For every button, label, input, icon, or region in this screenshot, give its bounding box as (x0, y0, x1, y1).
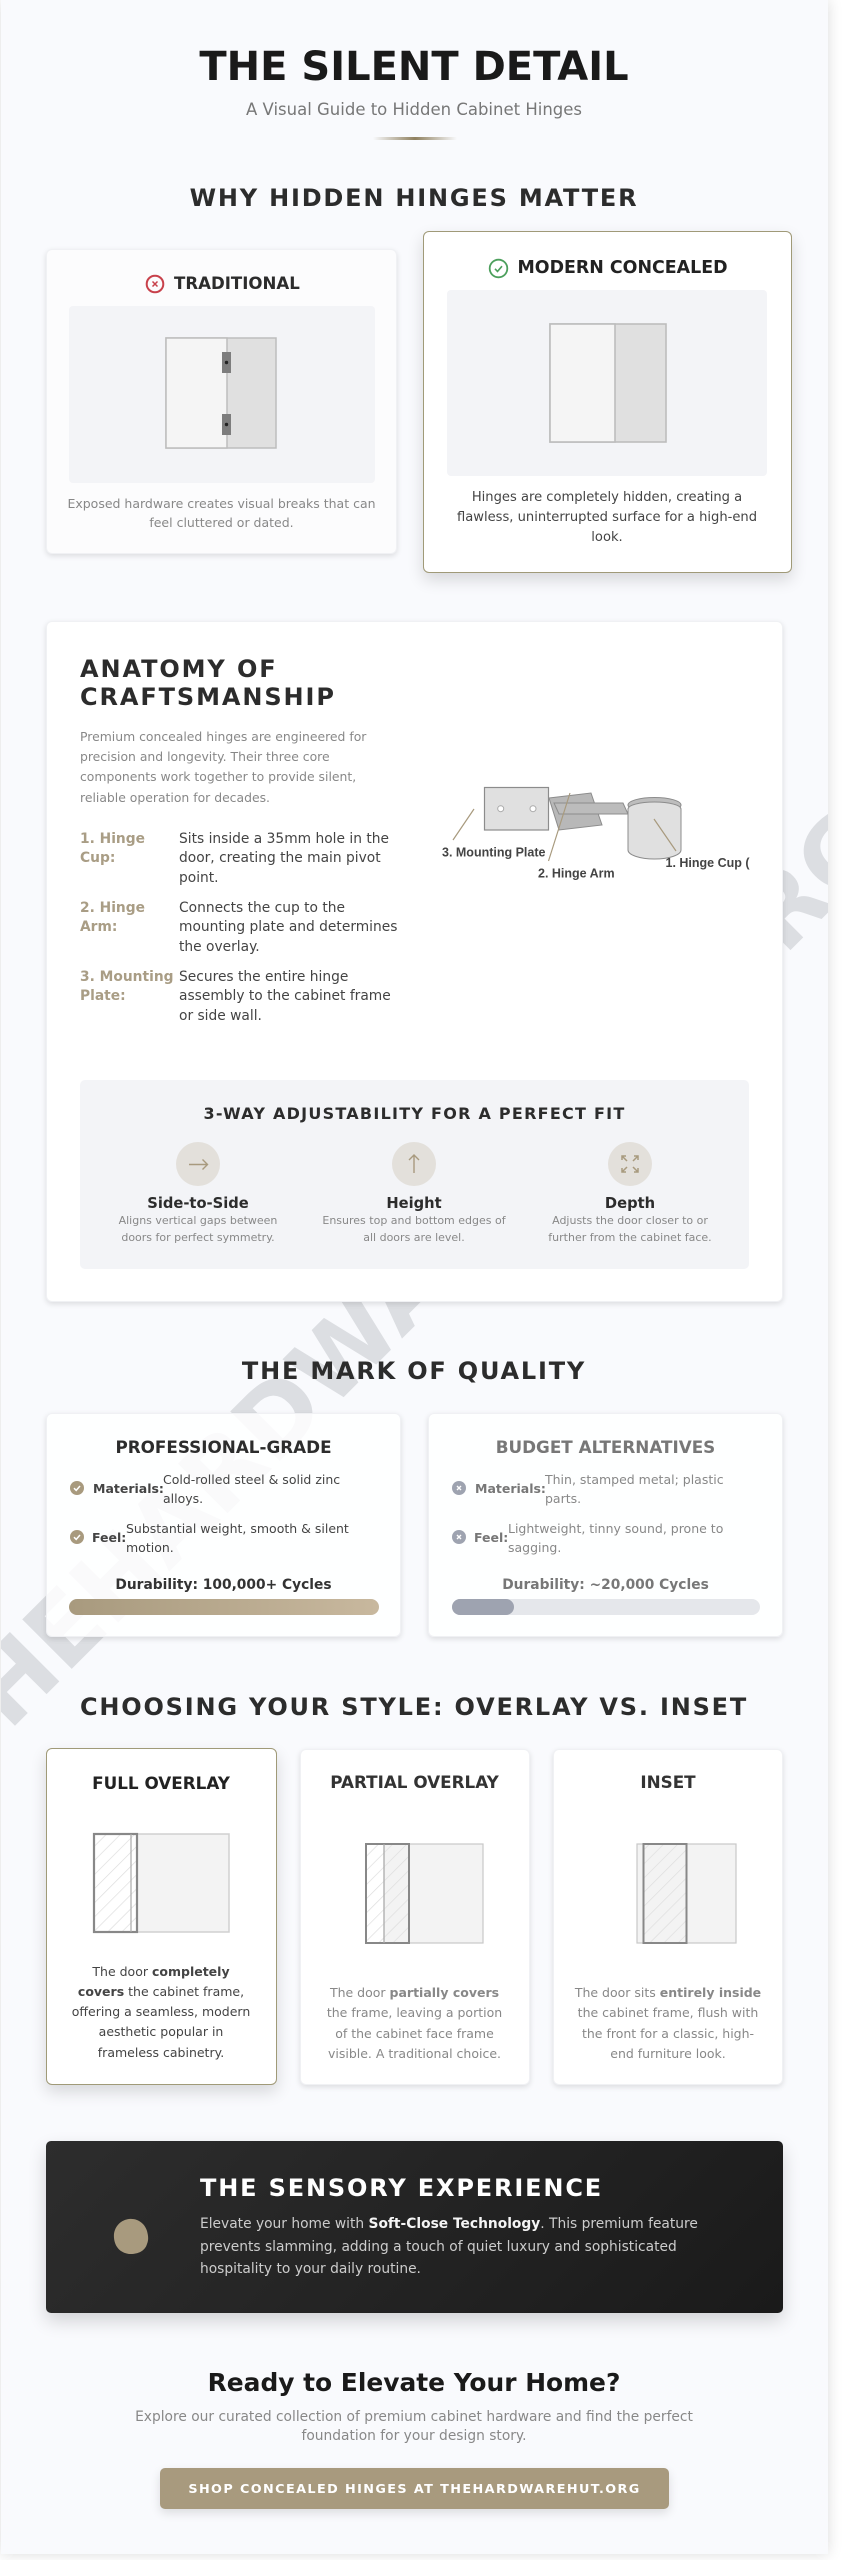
text: of the cabinet face frame (335, 2026, 494, 2041)
label: Feel: (474, 1530, 508, 1545)
description: further from the cabinet face. (548, 1231, 712, 1244)
label: Height (386, 1194, 442, 1212)
heading: INSET (640, 1772, 696, 1792)
panel: traditional (46, 249, 397, 554)
text: parts. (545, 1491, 581, 1506)
part label: 2. Hinge (80, 900, 145, 916)
diagram: hinge anatomy: 3. Mounting Plate (442, 846, 546, 860)
diagram: full overlay (92, 1832, 230, 1934)
part label: 1. Hinge (80, 831, 145, 847)
icon: up arrow (392, 1142, 436, 1186)
heading: modern concealed: MODERN CONCEALED (518, 258, 728, 278)
label: Feel: (92, 1530, 126, 1545)
panel: sensory experience (46, 2141, 783, 2313)
panel: inset (553, 1749, 783, 2085)
icon: soft-close blob (114, 2219, 149, 2254)
text (200, 2213, 698, 2281)
text: call to action (0, 2408, 828, 2447)
subtitle: A Visual Guide to Hidden Cabinet Hinges (246, 100, 582, 118)
part description: Sits inside a 35mm hole in the (179, 831, 389, 847)
icon: cross (452, 1481, 466, 1495)
label: Materials: (475, 1481, 546, 1496)
diagram: hinge anatomy: 2. Hinge Arm (538, 866, 615, 880)
icon: cross (452, 1530, 466, 1544)
heading: the mark of quality: THE MARK OF QUALITY (242, 1357, 586, 1385)
diagram: hinge anatomy: 1. Hinge Cup ( (666, 856, 750, 870)
text: modern description: Hinges are completely hidden, creating a (472, 490, 742, 505)
icon: expand arrows (608, 1142, 652, 1186)
text: modern description: flawless, uninterrupted surface for a high-end (457, 510, 757, 525)
durability label: Durability: 100,000+ Cycles (115, 1576, 332, 1592)
text (126, 1520, 349, 1555)
panel: budget alternatives (428, 1413, 783, 1637)
text: hospitality to your daily routine. (200, 2261, 421, 2277)
adjustment: side-to-side (118, 1142, 277, 1244)
text: traditional description: feel cluttered or dated. (149, 515, 294, 530)
description: Ensures top and bottom edges of (322, 1214, 506, 1227)
door diagram (165, 337, 277, 449)
text: covers the cabinet frame, (78, 1984, 244, 1999)
diagram: inset (636, 1843, 740, 1945)
row: materials (70, 1472, 340, 1506)
diagram: partial overlay (364, 1843, 486, 1945)
part description: mounting plate and determines (179, 919, 397, 935)
part description (179, 969, 391, 1024)
text: the front for a classic, high- (582, 2026, 754, 2041)
text: motion. (126, 1540, 174, 1555)
panel: modern concealed (423, 231, 792, 573)
description: Aligns vertical gaps between (119, 1214, 277, 1227)
text: call to action: foundation for your design story. (301, 2428, 527, 2444)
text: visible. A traditional choice. (328, 2046, 501, 2061)
heading: adjustability: 3-WAY ADJUSTABILITY FOR A PERFECT FIT (203, 1104, 626, 1123)
part: hinge arm (80, 900, 397, 955)
description (548, 1214, 712, 1244)
heading: anatomy: ANATOMY OF (80, 655, 278, 683)
durability label: Durability: ~20,000 Cycles (502, 1576, 709, 1592)
part label (80, 831, 145, 866)
title: THE SILENT DETAIL (199, 44, 629, 90)
text: The door completely (92, 1964, 230, 1978)
text: Elevate your home with Soft-Close Technology. This premium feature (200, 2216, 698, 2232)
text: anatomy intro: components work together to provide silent, (80, 769, 356, 784)
text (163, 1472, 340, 1506)
durability bar (452, 1599, 760, 1615)
button: shop: SHOP CONCEALED HINGES AT THEHARDWAREHUT.ORG (188, 2482, 641, 2497)
visual: hidden hinges door (446, 290, 766, 476)
text: Substantial weight, smooth & silent (126, 1520, 349, 1536)
text: frameless cabinetry. (98, 2045, 224, 2060)
text: Lightweight, tinny sound, prone to (508, 1520, 723, 1536)
button: shop (160, 2468, 669, 2509)
text (544, 1472, 724, 1506)
label: Depth (605, 1194, 655, 1212)
visual: exposed hinges door (69, 306, 375, 483)
row: feel (452, 1520, 723, 1555)
text: The door partially covers (330, 1985, 499, 2000)
row: materials (452, 1472, 724, 1506)
part label: Cup: (80, 850, 115, 866)
durability bar fill (452, 1599, 514, 1615)
part label: 3. Mounting (80, 969, 174, 985)
adjustment: depth (548, 1142, 712, 1244)
durability bar (68, 1599, 378, 1615)
label: Side-to-Side (147, 1194, 249, 1212)
part description: door, creating the main pivot (179, 850, 381, 866)
part label (80, 969, 174, 1004)
heading: choosing your style: CHOOSING YOUR STYLE: OVERLAY VS. INSET (80, 1693, 748, 1721)
text: end furniture look. (610, 2046, 726, 2061)
text: prevents slamming, adding a touch of quiet luxury and sophisticated (200, 2239, 677, 2255)
text: Thin, stamped metal; plastic (545, 1472, 724, 1486)
icon: green check (488, 258, 508, 278)
part label: Plate: (80, 988, 126, 1004)
part description (179, 831, 389, 886)
part description: the overlay. (179, 939, 260, 955)
part description: or side wall. (179, 1008, 262, 1024)
description (118, 1214, 277, 1244)
part description: Connects the cup to the (179, 900, 345, 916)
heading: why hidden hinges matter: WHY HIDDEN HINGES MATTER (190, 184, 638, 212)
text (47, 1962, 275, 2063)
panel: anatomy of craftsmanship (46, 621, 783, 1302)
adjustment: height (322, 1142, 506, 1244)
icon: red cross (146, 274, 164, 294)
text: The door sits entirely inside (575, 1985, 761, 2000)
description: doors for perfect symmetry. (121, 1231, 275, 1244)
text: anatomy intro: reliable operation for decades. (80, 790, 270, 805)
part label: Arm: (80, 919, 117, 935)
text: anatomy intro (80, 728, 366, 805)
diagram: hinge anatomy (442, 786, 750, 880)
heading: THE SENSORY EXPERIENCE (200, 2174, 603, 2202)
heading: FULL OVERLAY (92, 1773, 230, 1793)
heading: anatomy (80, 655, 336, 711)
text: anatomy intro: Premium concealed hinges are engineered for (80, 728, 366, 744)
heading: BUDGET ALTERNATIVES (496, 1437, 715, 1457)
heading: traditional: TRADITIONAL (174, 274, 300, 293)
text: call to action: Explore our curated collection of premium cabinet hardware and find the perfect (135, 2409, 693, 2425)
icon: right arrow (176, 1142, 220, 1186)
panel: adjustability (80, 1080, 749, 1269)
description: Adjusts the door closer to or (552, 1214, 708, 1227)
text: modern description (457, 490, 757, 545)
part description: point. (179, 870, 219, 886)
description: all doors are level. (363, 1231, 465, 1244)
heading: PARTIAL OVERLAY (330, 1772, 499, 1792)
text (508, 1520, 723, 1555)
part: mounting plate (80, 969, 391, 1024)
text: traditional description (67, 496, 376, 530)
part description (179, 900, 397, 955)
part label (80, 900, 145, 935)
part description: Secures the entire hinge (179, 969, 348, 985)
text: anatomy intro: precision and longevity. Their three core (80, 749, 330, 764)
description (322, 1214, 506, 1244)
text: the frame, leaving a portion (327, 2005, 502, 2020)
heading: call to action: Ready to Elevate Your Home? (208, 2368, 620, 2397)
door diagram (549, 323, 667, 443)
text: the cabinet frame, flush with (578, 2005, 758, 2020)
heading: PROFESSIONAL-GRADE (115, 1437, 332, 1457)
icon: check (70, 1481, 84, 1495)
part description: assembly to the cabinet frame (179, 988, 391, 1004)
panel: professional-grade (46, 1413, 401, 1637)
text: Cold-rolled steel & solid zinc (163, 1472, 340, 1486)
row: feel (70, 1520, 349, 1555)
text: traditional description: Exposed hardware creates visual breaks that can (67, 496, 376, 511)
text (300, 1983, 528, 2064)
text: sagging. (508, 1540, 561, 1555)
panel: partial overlay (300, 1749, 530, 2085)
text (554, 1983, 782, 2064)
part: hinge cup (80, 831, 389, 886)
heading: anatomy: CRAFTSMANSHIP (80, 683, 336, 711)
icon: check (70, 1530, 84, 1544)
panel: full overlay (46, 1748, 277, 2085)
title divider (373, 137, 457, 140)
label: Materials: (93, 1481, 164, 1496)
text: modern description: look. (591, 530, 623, 545)
text: aesthetic popular in (99, 2024, 223, 2039)
text: alloys. (163, 1491, 203, 1506)
text: offering a seamless, modern (72, 2004, 250, 2019)
